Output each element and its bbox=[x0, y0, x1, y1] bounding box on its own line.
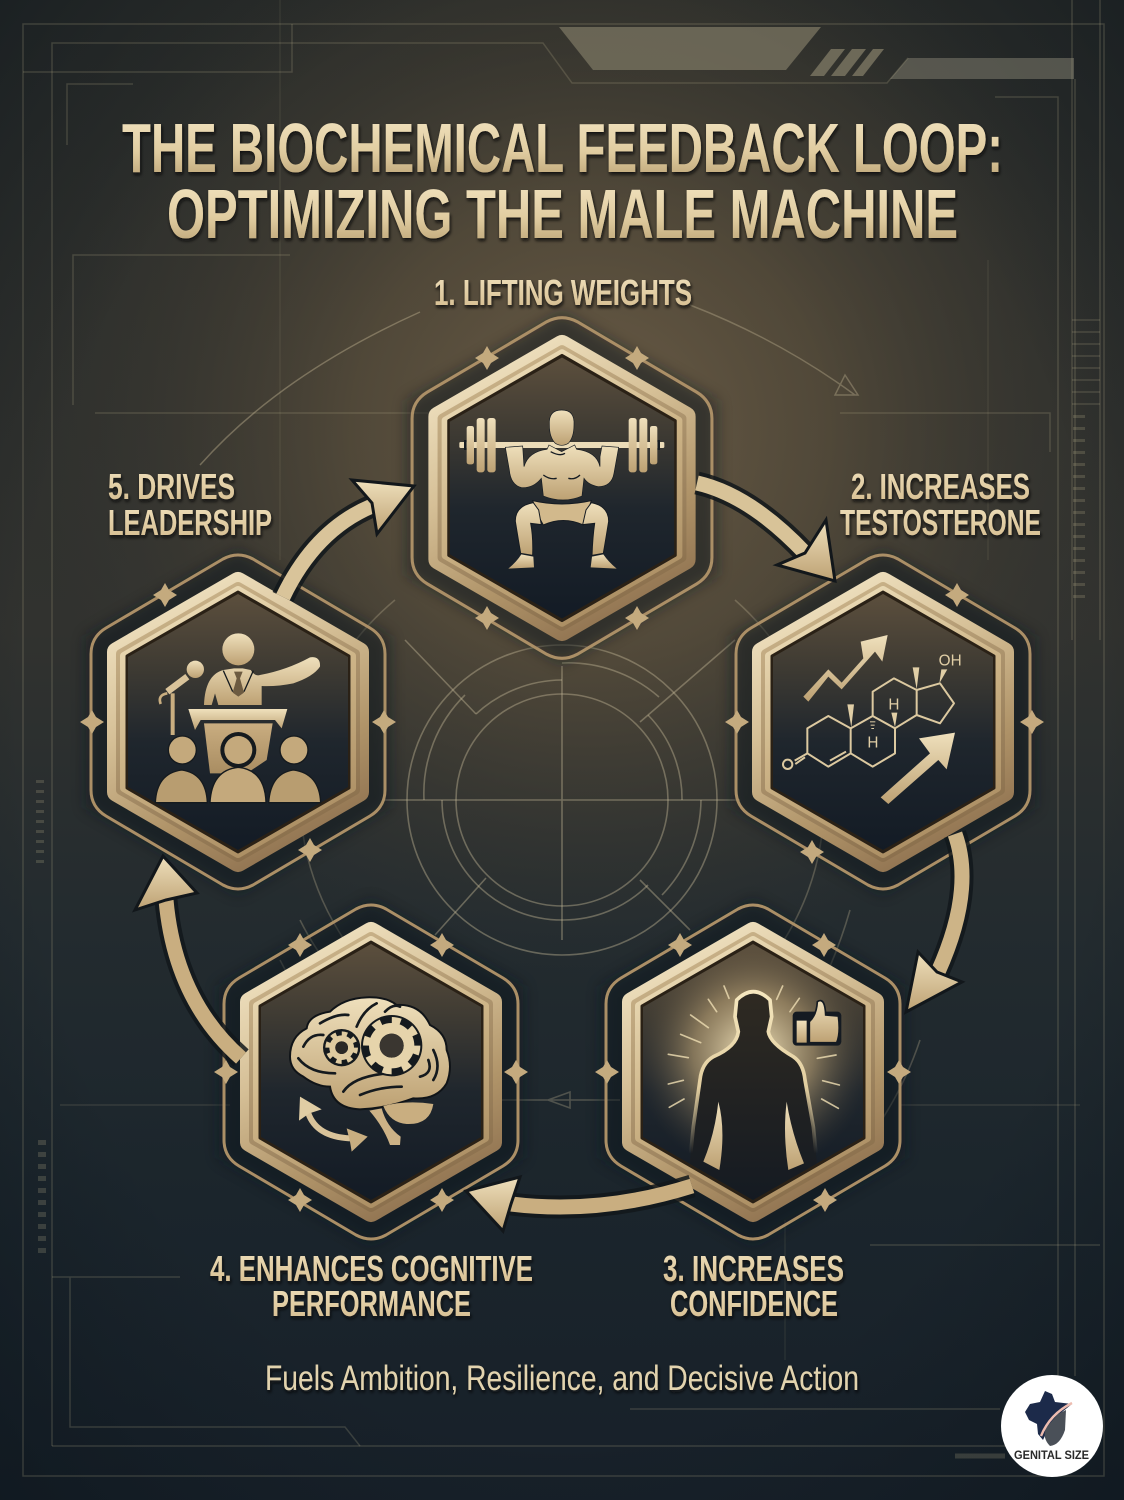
label: step 5 bbox=[108, 466, 272, 543]
label: step 5: LEADERSHIP bbox=[108, 502, 272, 543]
icon: testosterone molecule with arrows: H bbox=[867, 734, 878, 751]
icon: speaker at podium with audience bbox=[155, 633, 321, 803]
label: step 2: 2. INCREASES bbox=[851, 466, 1030, 507]
arrow: step 2 to step 3 bbox=[906, 834, 962, 1012]
icon: testosterone molecule with arrows: OH bbox=[939, 652, 962, 669]
arrow: step 3 to step 4 bbox=[466, 1177, 692, 1231]
label: step 3: 3. INCREASES bbox=[663, 1248, 844, 1289]
title bbox=[122, 109, 1003, 253]
hexagon: increases confidence bbox=[595, 900, 911, 1244]
label: step 4: 4. ENHANCES COGNITIVE bbox=[210, 1248, 533, 1289]
arrow: step 1 to step 2 bbox=[697, 483, 835, 581]
icon: testosterone molecule with arrows: H bbox=[888, 696, 899, 713]
label: step 3 bbox=[663, 1248, 844, 1324]
hexagon: lifting weights bbox=[407, 313, 717, 663]
icon: glowing silhouette with thumbs up bbox=[648, 958, 859, 1170]
hexagon: drives leadership bbox=[80, 550, 396, 894]
label: step 3: CONFIDENCE bbox=[670, 1283, 838, 1324]
hexagon: increases testosterone bbox=[725, 550, 1044, 894]
label: step 1: 1. LIFTING WEIGHTS bbox=[434, 272, 692, 313]
arrow: step 4 to step 5 bbox=[135, 856, 241, 1058]
arrow: step 5 to step 1 bbox=[283, 480, 414, 597]
icon: brain with gears bbox=[290, 997, 450, 1152]
label: step 4: PERFORMANCE bbox=[272, 1283, 471, 1324]
logo badge: GENITAL SIZE bbox=[1014, 1450, 1089, 1462]
icon: testosterone molecule with arrows bbox=[783, 635, 962, 804]
label: step 2 bbox=[840, 466, 1041, 543]
label: step 4 bbox=[210, 1248, 533, 1324]
hexagon: enhances cognitive performance bbox=[214, 900, 528, 1244]
tagline: Fuels Ambition, Resilience, and Decisive Action bbox=[265, 1359, 859, 1398]
logo badge bbox=[1001, 1375, 1103, 1477]
label: step 5: 5. DRIVES bbox=[108, 466, 235, 507]
icon: squat lifter bbox=[459, 410, 664, 569]
central target circles bbox=[280, 600, 920, 1150]
